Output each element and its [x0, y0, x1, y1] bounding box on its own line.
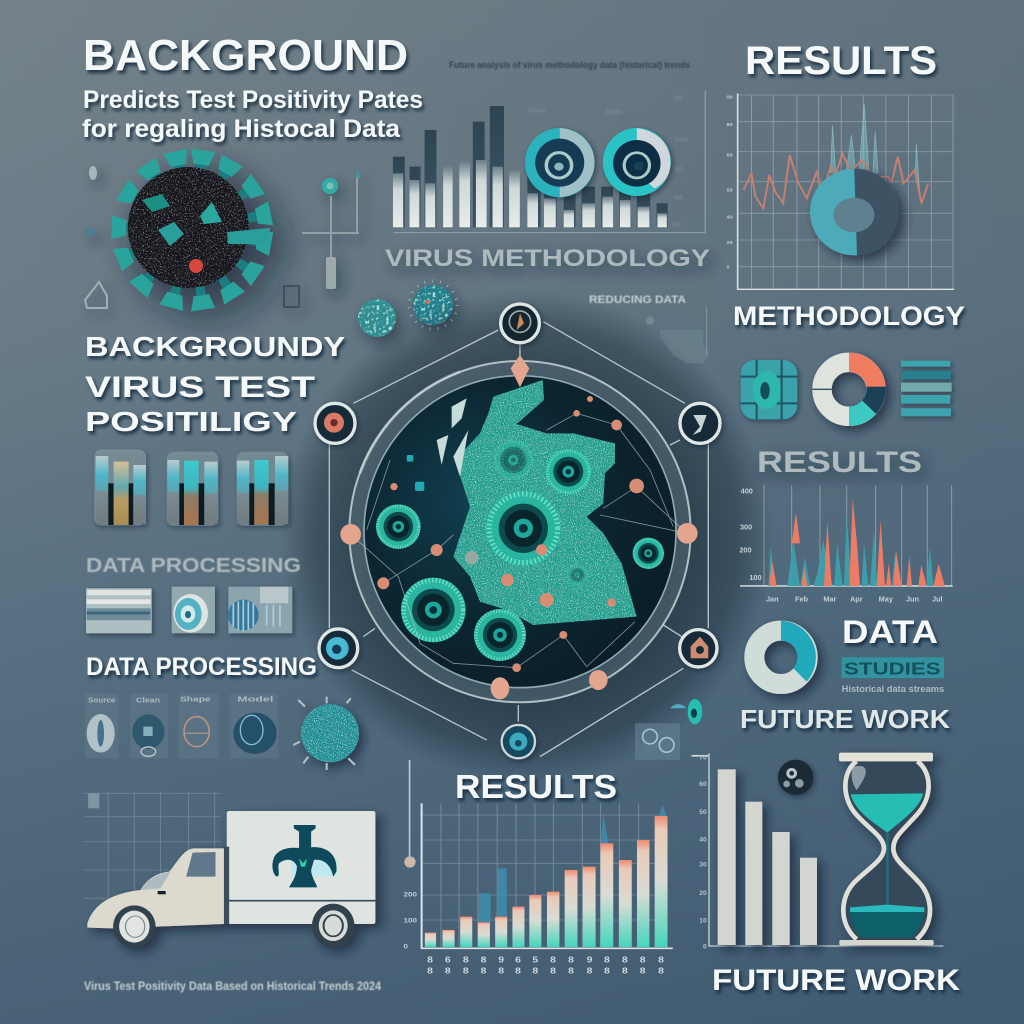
coral spikes [769, 498, 945, 586]
data strip [842, 657, 944, 694]
icon: striped card [228, 587, 292, 633]
heading: results top right: RESULTS [745, 39, 937, 83]
bar chart: results bottom: 8 [568, 966, 575, 976]
truck logo [272, 825, 337, 887]
cyan spikes [831, 103, 919, 190]
icon row labelled: Source [88, 696, 115, 705]
dark bars [393, 106, 668, 227]
axis labels: 40 [727, 215, 733, 220]
virus particles [376, 504, 421, 549]
chart labels: Rate [606, 108, 623, 116]
panel: donut and legend icons right [739, 353, 953, 694]
heading: results right: RESULTS [757, 446, 922, 479]
map shape [453, 380, 637, 625]
falling bar chart: 40 [699, 837, 707, 844]
falling bar chart: 60 [699, 781, 707, 788]
axis labels: 300 [740, 522, 752, 531]
icon: teal virus lower left [293, 697, 359, 770]
axis labels: 50 [727, 188, 733, 193]
panel: data processing icons [85, 449, 359, 770]
axis labels: 60 [727, 153, 733, 158]
small icon card lower right [635, 699, 708, 760]
heading: backgroundy: BACKGROUNDY [85, 331, 345, 362]
heading: data processing grey: DATA PROCESSING [86, 555, 301, 577]
axis labels: 200 [739, 546, 752, 555]
blue backdrop bars [479, 805, 667, 923]
icon group: cylinders two [167, 452, 218, 526]
rim beads [340, 355, 698, 699]
bar chart: results bottom: 6 [515, 955, 521, 965]
icon: brick dial [741, 360, 797, 419]
data strip: Historical data streams [842, 684, 944, 694]
dial left [525, 128, 595, 197]
axis labels: 100 [749, 573, 762, 582]
heading: results bottom: RESULTS [455, 768, 617, 805]
small header caption: Future analysis of virus methodology data (historical) trends [449, 60, 690, 70]
icon: large virus [111, 149, 273, 311]
heading: positiligy: POSITILIGY [85, 406, 297, 437]
chart labels: 00 [674, 94, 683, 102]
chart labels: Data [528, 106, 546, 114]
truck body [87, 811, 375, 948]
bar chart: results bottom: 8 [463, 966, 469, 976]
data strip: STUDIES [844, 658, 941, 678]
dish shadow [280, 290, 773, 783]
icon row labelled: Clean [136, 696, 161, 705]
axis labels: May [879, 595, 894, 604]
icon: data table card [86, 588, 152, 633]
bar chart: results bottom: 8 [604, 966, 610, 976]
map islets [437, 398, 468, 477]
bar chart: results bottom: 8 [427, 966, 434, 976]
falling bar chart: 20 [699, 890, 707, 897]
bar chart: results bottom: 8 [498, 966, 505, 976]
bar chart: results bottom: 8 [622, 955, 629, 965]
subheading line two: for regaling Histocal Data [82, 115, 401, 143]
icon group: cylinders one [94, 449, 146, 525]
node icons [315, 304, 720, 758]
axis labels: 00 [727, 95, 733, 100]
axis labels: 100 [404, 916, 417, 924]
axis labels: Apr [850, 595, 863, 604]
icon row labelled [85, 693, 278, 758]
icon: target card [172, 587, 215, 633]
axis labels: Jan [766, 595, 779, 604]
small annotation icons around virus [85, 166, 360, 308]
icon row labelled: Model [237, 695, 273, 704]
heading: data: DATA [842, 614, 938, 650]
bar chart: results bottom: 9 [587, 955, 592, 965]
falling bar chart: 70 [699, 754, 707, 761]
falling bar chart [699, 753, 943, 950]
bar chart: results bottom: 5 [532, 955, 539, 965]
bar spike chart [739, 485, 953, 604]
heading: data processing: DATA PROCESSING [86, 653, 317, 681]
hexagon connectors [329, 322, 708, 757]
bar chart: results bottom: 8 [640, 966, 646, 976]
icon: data table [901, 361, 952, 416]
chart labels [528, 94, 688, 228]
axis labels: 0 [727, 265, 730, 270]
axis labels: Feb [795, 595, 809, 604]
bar chart: results bottom: 8 [640, 955, 646, 965]
axis labels: 80 [727, 122, 733, 128]
bar chart: results bottom: 8 [481, 966, 487, 976]
bar chart: results bottom: 8 [550, 966, 557, 976]
result bars [425, 816, 668, 947]
caption under truck: Virus Test Positivity Data Based on Historical Trends 2024 [84, 979, 381, 993]
chart labels: 80 [674, 165, 683, 173]
heading: future work bottom: FUTURE WORK [712, 964, 960, 997]
central network hub [280, 290, 773, 783]
hourglass [839, 753, 934, 945]
glass dish [349, 361, 691, 702]
axis labels: 0 [404, 942, 408, 950]
bar chart: results bottom: 8 [532, 966, 539, 976]
bar chart: results bottom: 8 [658, 955, 665, 965]
axis labels [404, 890, 417, 950]
axis labels: 200 [404, 890, 417, 898]
axis labels [739, 486, 943, 604]
map glow panel [407, 455, 424, 491]
heading: virus methodology: VIRUS METHODOLOGY [385, 245, 710, 272]
axis labels [727, 95, 733, 270]
bar chart: results bottom: 8 [463, 955, 469, 965]
line chart with donut: methodology [727, 93, 954, 289]
bar chart: results bottom: 8 [658, 966, 665, 976]
small label: reducing: REDUCING DATA [589, 294, 686, 306]
bar chart: results bottom: 8 [445, 966, 451, 976]
falling bar chart: 50 [699, 809, 707, 816]
axis labels: 400 [741, 486, 753, 495]
heading: background: BACKGROUND [83, 31, 408, 80]
bar chart: results bottom: 8 [587, 966, 593, 976]
bar chart: results bottom: 8 [515, 966, 522, 976]
bar chart: results bottom: 6 [445, 955, 451, 965]
icon group: cylinders three [237, 452, 288, 526]
donut chart data [754, 621, 816, 684]
icon row labelled: Shape [180, 695, 211, 704]
bar chart: results bottom: 8 [622, 966, 629, 976]
grid [738, 95, 953, 289]
axis labels: 20 [727, 240, 733, 246]
chart frame [394, 91, 705, 233]
network nodes [377, 396, 644, 672]
axis labels: Mar [823, 595, 837, 604]
teal spikes [768, 513, 933, 586]
heading: future work upper: FUTURE WORK [740, 704, 950, 734]
donut [810, 169, 899, 255]
falling bar chart: 0 [703, 943, 707, 950]
panel: delivery truck [84, 792, 375, 948]
bar chart: results bottom [404, 760, 673, 976]
bar chart: results bottom: 8 [550, 955, 557, 965]
grid behind truck [84, 792, 221, 898]
red line series [744, 153, 928, 208]
donut chart with four segments [812, 353, 886, 426]
light bars [393, 160, 667, 227]
thin network lines [351, 413, 687, 668]
subheading line one: Predicts Test Positivity Pates [83, 86, 423, 114]
small clock icon [778, 760, 813, 795]
panel: future work chart and hourglass [699, 753, 943, 950]
bar chart: results bottom: 8 [568, 955, 575, 965]
heading: methodology: METHODOLOGY [733, 301, 965, 331]
small viruses [358, 281, 457, 337]
bar chart: results bottom: 8 [427, 955, 434, 965]
axis labels: Jul [932, 595, 943, 604]
falling bar chart: 30 [699, 862, 707, 869]
faint icon above dish [646, 307, 710, 363]
bar chart and dials: virus methodology [393, 91, 705, 233]
connector with bead [404, 760, 416, 868]
heading: virus test: VIRUS TEST [85, 371, 315, 404]
grid [422, 803, 667, 947]
chart labels: 40 [672, 220, 681, 228]
dial right [603, 128, 671, 196]
axis labels: Jun [906, 595, 920, 604]
chart labels: 60 [674, 193, 683, 201]
bar chart: results bottom: 8 [604, 955, 610, 965]
chart labels: 100 [674, 135, 688, 143]
bar chart: results bottom: 9 [498, 955, 504, 965]
bar chart: results bottom: 8 [481, 955, 487, 965]
falling bar chart: 10 [699, 918, 707, 925]
